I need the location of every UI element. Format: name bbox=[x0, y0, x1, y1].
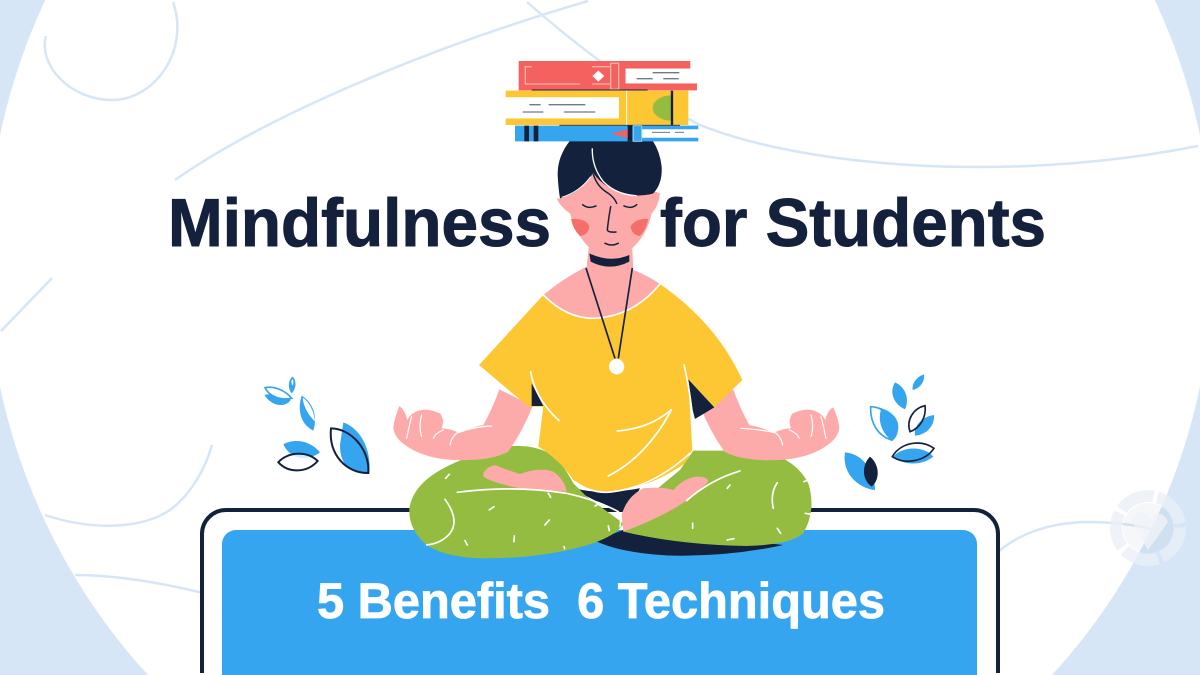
blue banner bbox=[222, 530, 977, 675]
left leg bbox=[409, 446, 623, 558]
leg details bbox=[407, 415, 826, 549]
hair bbox=[558, 141, 662, 198]
face bbox=[557, 150, 660, 257]
shirt details bbox=[531, 284, 693, 492]
right arm bbox=[700, 389, 839, 460]
cushion shadow bbox=[595, 530, 783, 556]
feet bbox=[483, 465, 567, 492]
face details bbox=[583, 174, 637, 245]
person head and books bbox=[506, 61, 698, 267]
under-sleeve shadows bbox=[532, 379, 714, 419]
watermark logo bbox=[1116, 496, 1180, 560]
bottom frame bbox=[204, 512, 996, 673]
title: for Students bbox=[660, 185, 1046, 261]
yellow book bbox=[506, 91, 688, 125]
choker bbox=[589, 253, 629, 267]
cheeks bbox=[571, 219, 589, 236]
leaves left bbox=[264, 377, 370, 473]
blue book bbox=[515, 126, 698, 141]
left arm bbox=[393, 389, 533, 460]
right leg bbox=[623, 451, 811, 546]
leaves right bbox=[845, 374, 934, 490]
title bbox=[168, 185, 1046, 261]
red book bbox=[519, 61, 697, 90]
dark shorts bbox=[565, 485, 640, 512]
necklace bbox=[586, 268, 632, 358]
banner text: 5 Benefits 6 Techniques bbox=[317, 573, 885, 629]
chest bbox=[543, 237, 660, 318]
person body bbox=[393, 237, 839, 558]
title: Mindfulness bbox=[168, 185, 551, 261]
shirt bbox=[479, 284, 742, 492]
